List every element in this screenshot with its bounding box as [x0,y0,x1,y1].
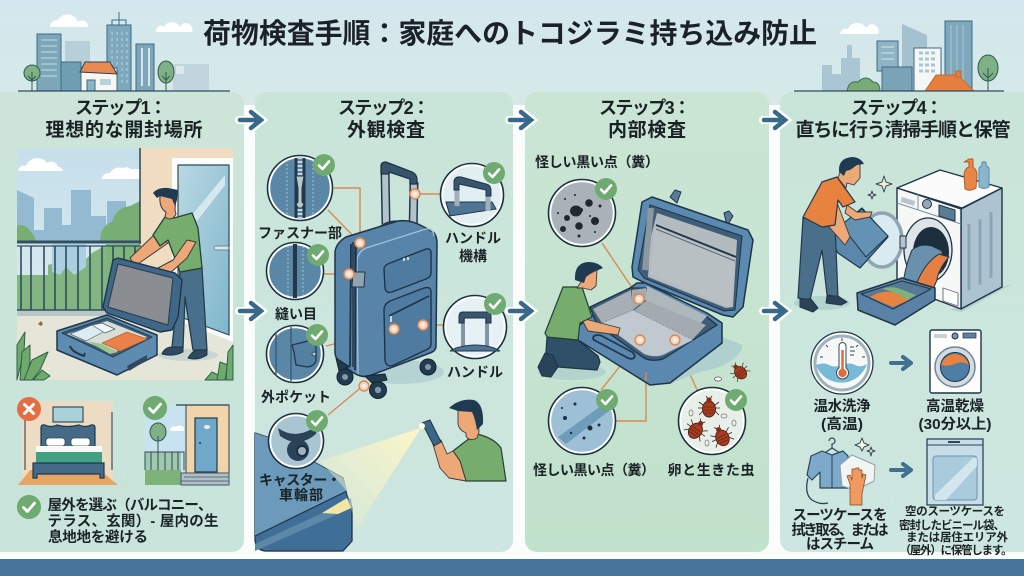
leader dots [634,294,680,345]
callout: seam [266,242,324,300]
check [307,244,329,266]
label: hot dry: 高温乾燥 [926,397,984,415]
note: choose outdoors: 屋外を選ぶ（バルコニー、 [48,497,212,514]
lid [670,190,733,226]
title: 荷物検査手順：家庭へのトコジラミ持ち込み防止 [203,18,817,49]
check [306,324,328,346]
flashlight beam [320,428,421,528]
callout: outer pocket [266,326,324,382]
arrow: step 3 to 4, top [763,111,786,129]
badge: ok [143,396,167,420]
text: wipe or steam: スーツケースを [792,507,888,524]
arrow: step 2 to 3, middle [509,302,532,320]
kneeling man and open suitcase [538,190,753,385]
label: 縫い目 [275,306,317,322]
heading: step 4 [796,98,1010,141]
arrow: step 1 to 2, top [239,111,262,129]
illustration: man opening suitcase on balcony [17,148,233,380]
label: hot wash: 温水洗浄 [814,397,871,415]
heading: step 1: 理想的な開封場所 [46,119,202,141]
heading: step 4: ステップ4： [851,98,943,118]
badge: ok note [17,495,41,519]
label: ハンドル [445,230,501,246]
panel: step 3 [525,92,769,552]
callout: dark spots [548,180,616,246]
sparkles [876,176,892,192]
check [484,293,506,315]
man [798,218,838,300]
label: hot wash [814,397,871,433]
arrow: wipe to store [891,464,911,476]
callout: handle mechanism [440,164,504,226]
text: wipe or steam: はスチーム [806,536,874,553]
heading: step 2: ステップ2： [338,98,430,118]
icon: wipe jacket [807,438,875,505]
heading: step 2 [338,98,430,141]
panel: step 4 [780,92,1024,557]
label [259,472,341,503]
label: キャスター・ [259,472,341,488]
heading: step 4: 直ちに行う清掃手順と保管 [796,118,1010,141]
comparison: bedroom (avoid) [18,401,118,485]
arrow: step 3 to 4, middle [763,303,786,320]
callout: eggs and live bugs [678,388,746,454]
panel: step 2 [255,92,513,552]
base [577,283,722,385]
icon: dryer [930,330,981,393]
label: 卵と生きた虫 [668,462,754,478]
callout: marks on seam [548,388,616,454]
label: hot wash: (高温) [821,416,863,433]
check [596,389,618,411]
label: 怪しい黒い点（糞） [533,462,655,478]
skyline: left city with house [18,12,230,91]
text: storage: （屋外）に保管します。 [900,543,1012,557]
badge: not allowed [17,397,41,421]
check [595,178,617,200]
label: hot dry [918,397,992,433]
label [445,230,501,264]
label: 外ポケット [261,389,331,405]
heading: step 1 [46,98,202,141]
leader lines [601,243,698,421]
basket [857,278,935,325]
label: 機構 [459,248,487,264]
arrow: step 1 to 2, middle [239,302,262,320]
leader lines [323,188,445,415]
callout: handle [444,296,506,358]
heading: step 3: ステップ3： [599,98,691,118]
arrow: wash to dry [891,357,911,369]
text: storage: または居住エリア外 [906,530,1008,544]
text: wipe or steam [792,507,889,553]
plants [17,332,233,380]
text: storage [899,504,1012,557]
label: 怪しい黒い点（糞） [535,154,659,170]
label: hot dry: (30分以上) [918,416,992,433]
label: ハンドル [447,364,503,380]
text: wipe or steam: 拭き取る、または [792,522,889,539]
heading: step 1: ステップ1： [75,98,167,118]
icon: sealed bag [927,439,983,505]
note: choose outdoors: テラス、玄関）- 屋内の生 [48,512,218,530]
foreground suitcase corner [255,433,352,551]
man [546,337,600,370]
callout: zipper [268,156,332,220]
arrows between panels [239,111,786,320]
man [158,349,218,361]
footer band [0,559,1024,576]
check [483,162,505,184]
leader dots [344,189,428,391]
check [306,410,328,432]
person with flashlight [419,400,506,481]
comparison: entrance (good) [145,405,229,485]
suitcase open [103,258,182,332]
heading: step 2: 外観検査 [347,119,425,141]
check [725,389,747,411]
callout: caster [268,414,324,468]
text: storage: 密封したビニール袋、 [899,518,1005,532]
clothes in hands [828,208,888,268]
label: ファスナー部 [258,225,342,241]
text: storage: 空のスーツケースを [905,504,1005,518]
heading: step 3 [599,98,691,141]
lone bug and egg [714,358,752,384]
heading: step 3: 内部検査 [608,119,686,141]
icon: temperature dial [811,332,873,394]
panel: step 1 [0,92,244,552]
arrow: step 2 to 3, top [509,111,532,129]
bottles [964,159,977,190]
skyline: right city with house [794,21,1004,91]
illustration: man loading washer [794,157,1012,325]
note: choose outdoors [48,497,218,546]
check [313,154,335,176]
label: 車輪部 [279,487,323,503]
suitcase [335,162,444,398]
note: choose outdoors: 息地地を避ける [48,528,148,546]
